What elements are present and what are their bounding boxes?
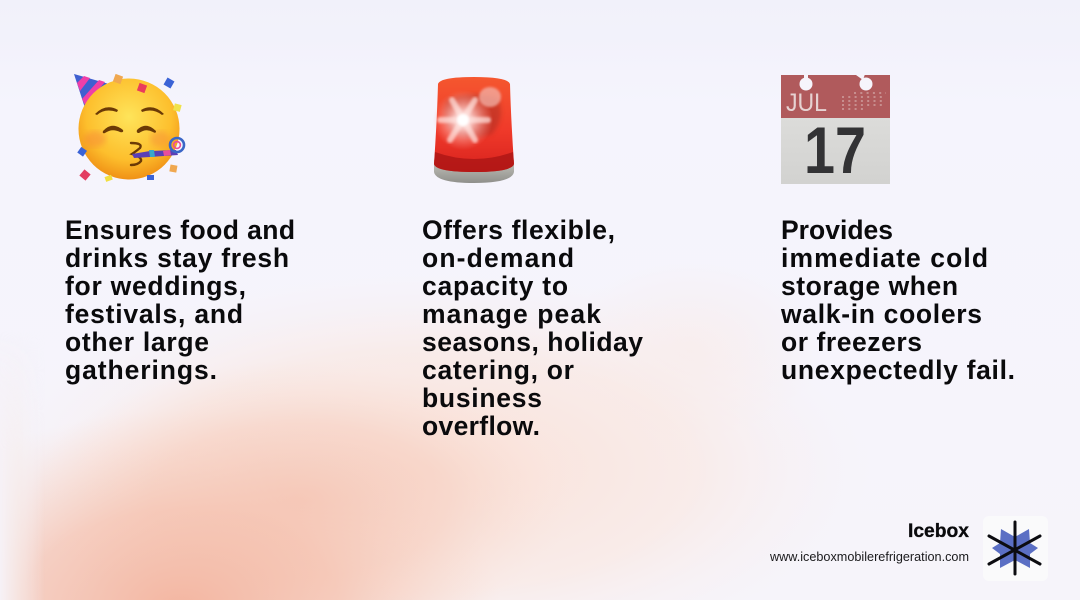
text block: column 2: Offers flexible, bbox=[422, 215, 615, 245]
text block: column 3: unexpectedly fail. bbox=[781, 355, 1015, 385]
calendar header bbox=[781, 75, 890, 118]
icon: red siren emoji bbox=[433, 77, 514, 183]
calendar date: 17 bbox=[804, 113, 866, 187]
party blower bbox=[132, 138, 184, 158]
text block: column 2 bbox=[422, 215, 643, 441]
text block: column 3: storage when bbox=[781, 271, 958, 301]
icon: calendar emoji bbox=[781, 74, 890, 187]
text block: column 3: or freezers bbox=[781, 327, 922, 357]
text block: column 2: on-demand bbox=[422, 243, 574, 273]
text block: column 2: seasons, holiday bbox=[422, 327, 643, 357]
party hat bbox=[74, 74, 109, 108]
text block: column 1: gatherings. bbox=[65, 355, 217, 385]
eyebrows and eyes bbox=[95, 107, 164, 133]
mouth bbox=[131, 143, 141, 165]
calendar page bbox=[781, 117, 890, 184]
text block: column 3: walk-in coolers bbox=[780, 299, 982, 329]
confetti bbox=[77, 74, 182, 182]
text block: column 2: catering, or bbox=[422, 355, 574, 385]
calendar mini grid bbox=[842, 93, 886, 109]
text block: column 2: capacity to bbox=[422, 271, 568, 301]
text block: column 3 bbox=[780, 215, 1015, 385]
text block: column 3: immediate cold bbox=[781, 243, 988, 273]
siren base bbox=[434, 160, 514, 183]
siren dome bbox=[434, 77, 514, 172]
face bbox=[78, 78, 180, 180]
text block: column 2: manage peak bbox=[422, 299, 601, 329]
text block: column 2: business bbox=[422, 383, 542, 413]
text block: column 1: Ensures food and bbox=[65, 215, 295, 245]
text block: column 1: drinks stay fresh bbox=[65, 243, 289, 273]
text block: column 1: for weddings, bbox=[65, 271, 246, 301]
icon: party face emoji bbox=[74, 74, 184, 182]
brand name: Icebox bbox=[908, 520, 969, 542]
text block: column 2: overflow. bbox=[422, 411, 540, 441]
siren flare bbox=[433, 90, 493, 150]
text block: column 1 bbox=[65, 215, 295, 385]
text block: column 1: other large bbox=[65, 327, 209, 357]
background gradient bbox=[2, 304, 776, 600]
text block: column 1: festivals, and bbox=[65, 299, 243, 329]
icon: icebox logo bbox=[983, 516, 1048, 581]
text block: column 3: Provides bbox=[781, 215, 893, 245]
website url: www.iceboxmobilerefrigeration.com bbox=[769, 550, 969, 564]
calendar month: JUL bbox=[786, 89, 827, 117]
